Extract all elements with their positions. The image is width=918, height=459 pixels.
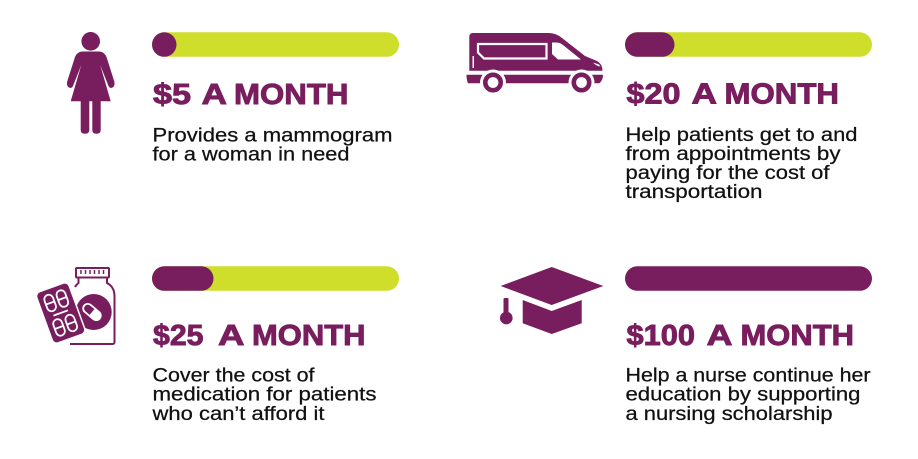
heading: $5 a month xyxy=(153,79,348,111)
progress bar: $20 xyxy=(625,32,872,57)
text: transportation description: Help patients get to and xyxy=(626,125,858,146)
heading: $5 a month: MONTH xyxy=(234,79,348,111)
panel: $100 a month xyxy=(500,266,872,425)
heading: $20 a month: A xyxy=(692,79,717,111)
heading: $100 a month: $100 xyxy=(626,320,695,352)
text: mammogram description: for a woman in need xyxy=(152,144,350,166)
text: transportation description: from appointments by xyxy=(626,144,841,165)
heading: $100 a month xyxy=(626,320,854,352)
panel: $25 a month xyxy=(36,266,399,425)
text: medication description: who can’t afford it xyxy=(151,404,325,425)
heading: $20 a month: MONTH xyxy=(724,79,839,111)
text: mammogram description: Provides a mammogram xyxy=(152,126,392,147)
progress bar: $5 xyxy=(152,32,399,57)
text: transportation description: transportation xyxy=(626,182,762,203)
panel: $20 a month xyxy=(466,32,872,203)
text: scholarship description: education by supporting xyxy=(626,385,860,406)
text: scholarship description xyxy=(626,366,871,425)
text: scholarship description: Help a nurse continue her xyxy=(626,366,871,387)
heading: $20 a month xyxy=(626,79,839,111)
heading: $25 a month: A xyxy=(218,320,245,352)
text: transportation description: paying for the cost of xyxy=(626,163,830,184)
text: medication description: Cover the cost of xyxy=(152,366,315,387)
heading: $5 a month: $5 xyxy=(153,79,191,111)
heading: $100 a month: MONTH xyxy=(740,320,854,352)
progress bar: $100 xyxy=(625,266,872,291)
icon: van xyxy=(466,33,603,96)
text: medication description xyxy=(151,366,376,425)
progress bar: $25 xyxy=(152,266,399,291)
heading: $5 a month: A xyxy=(202,79,227,111)
icon: medication bottle and blister pack xyxy=(36,268,114,344)
text: mammogram description xyxy=(152,126,392,166)
heading: $20 a month: $20 xyxy=(626,79,680,111)
panel: $5 a month xyxy=(67,32,399,166)
text: transportation description xyxy=(626,125,858,203)
icon: woman xyxy=(67,32,115,134)
text: medication description: medication for patients xyxy=(152,385,376,406)
icon: graduation cap xyxy=(500,267,603,334)
heading: $100 a month: A xyxy=(706,320,733,352)
text: scholarship description: a nursing scholarship xyxy=(626,404,832,425)
heading: $25 a month xyxy=(153,320,366,352)
heading: $25 a month: $25 xyxy=(153,320,204,352)
heading: $25 a month: MONTH xyxy=(252,320,366,352)
